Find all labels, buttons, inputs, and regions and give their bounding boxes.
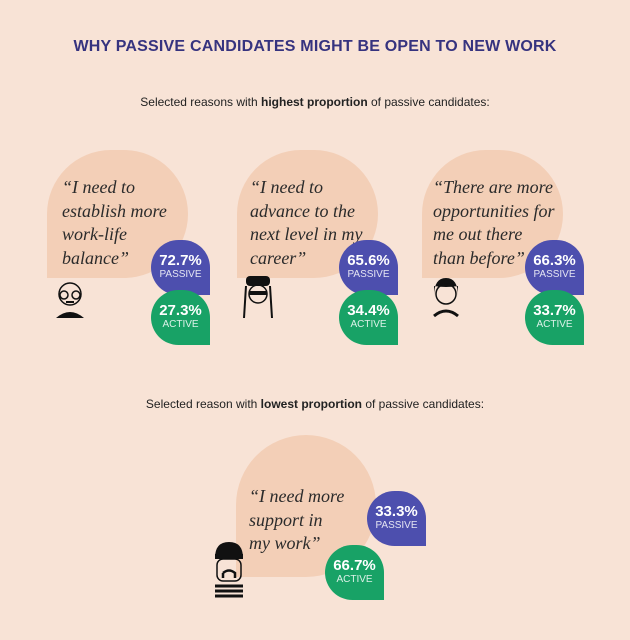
bubble xyxy=(237,150,378,278)
quote xyxy=(433,177,555,268)
icon: woman with hat xyxy=(243,276,273,318)
passive bubble xyxy=(339,240,398,295)
passive bubble: 66.3% xyxy=(533,252,576,269)
quote: “I need more xyxy=(249,486,344,506)
active bubble xyxy=(151,290,210,345)
panel: next level xyxy=(237,150,398,345)
active bubble: ACTIVE xyxy=(336,574,373,585)
quote: me out there xyxy=(433,224,522,244)
quote xyxy=(62,177,167,268)
passive bubble xyxy=(151,240,210,295)
passive bubble: PASSIVE xyxy=(159,269,202,280)
passive bubble: 33.3% xyxy=(375,503,418,520)
passive bubble xyxy=(525,240,584,295)
icon: man with beanie xyxy=(215,542,243,598)
active bubble: ACTIVE xyxy=(162,319,199,330)
icon: woman xyxy=(433,278,459,318)
panel: more support xyxy=(215,435,426,600)
active bubble xyxy=(525,290,584,345)
active bubble: ACTIVE xyxy=(536,319,573,330)
quote: my work” xyxy=(249,533,320,553)
icon: bald man xyxy=(56,282,84,318)
quote: balance” xyxy=(62,248,129,268)
passive bubble: PASSIVE xyxy=(533,269,576,280)
passive bubble: PASSIVE xyxy=(347,269,390,280)
quote: “There are more xyxy=(433,177,553,197)
active bubble: 27.3% xyxy=(159,302,202,319)
quote xyxy=(249,486,344,553)
active bubble: 33.7% xyxy=(533,302,576,319)
active bubble xyxy=(325,545,384,600)
quote: than before” xyxy=(433,248,525,268)
quote: next level in my xyxy=(250,224,362,244)
quote: “I need to xyxy=(250,177,323,197)
panel: work-life balance xyxy=(47,150,210,345)
active bubble: 66.7% xyxy=(333,557,376,574)
quote: work-life xyxy=(62,224,127,244)
bubble xyxy=(236,435,376,577)
subtitle bottom: Selected reason with lowest proportion of passive candidates: xyxy=(146,397,484,411)
quote: career” xyxy=(250,248,306,268)
quote: establish more xyxy=(62,200,167,220)
passive bubble xyxy=(367,491,426,546)
bubble xyxy=(422,150,563,278)
passive bubble: 72.7% xyxy=(159,252,202,269)
quote xyxy=(250,177,362,268)
quote: support in xyxy=(249,510,323,530)
quote: advance to the xyxy=(250,200,355,220)
active bubble: ACTIVE xyxy=(350,319,387,330)
passive bubble: PASSIVE xyxy=(375,520,418,531)
panel: more opportunities xyxy=(422,150,584,345)
quote: opportunities for xyxy=(433,200,555,220)
passive bubble: 65.6% xyxy=(347,252,390,269)
bubble xyxy=(47,150,188,278)
subtitle top: Selected reasons with highest proportion of passive candidates: xyxy=(140,95,490,109)
active bubble xyxy=(339,290,398,345)
active bubble: 34.4% xyxy=(347,302,390,319)
quote: “I need to xyxy=(62,177,135,197)
title: WHY PASSIVE CANDIDATES MIGHT BE OPEN TO NEW WORK xyxy=(73,38,557,55)
